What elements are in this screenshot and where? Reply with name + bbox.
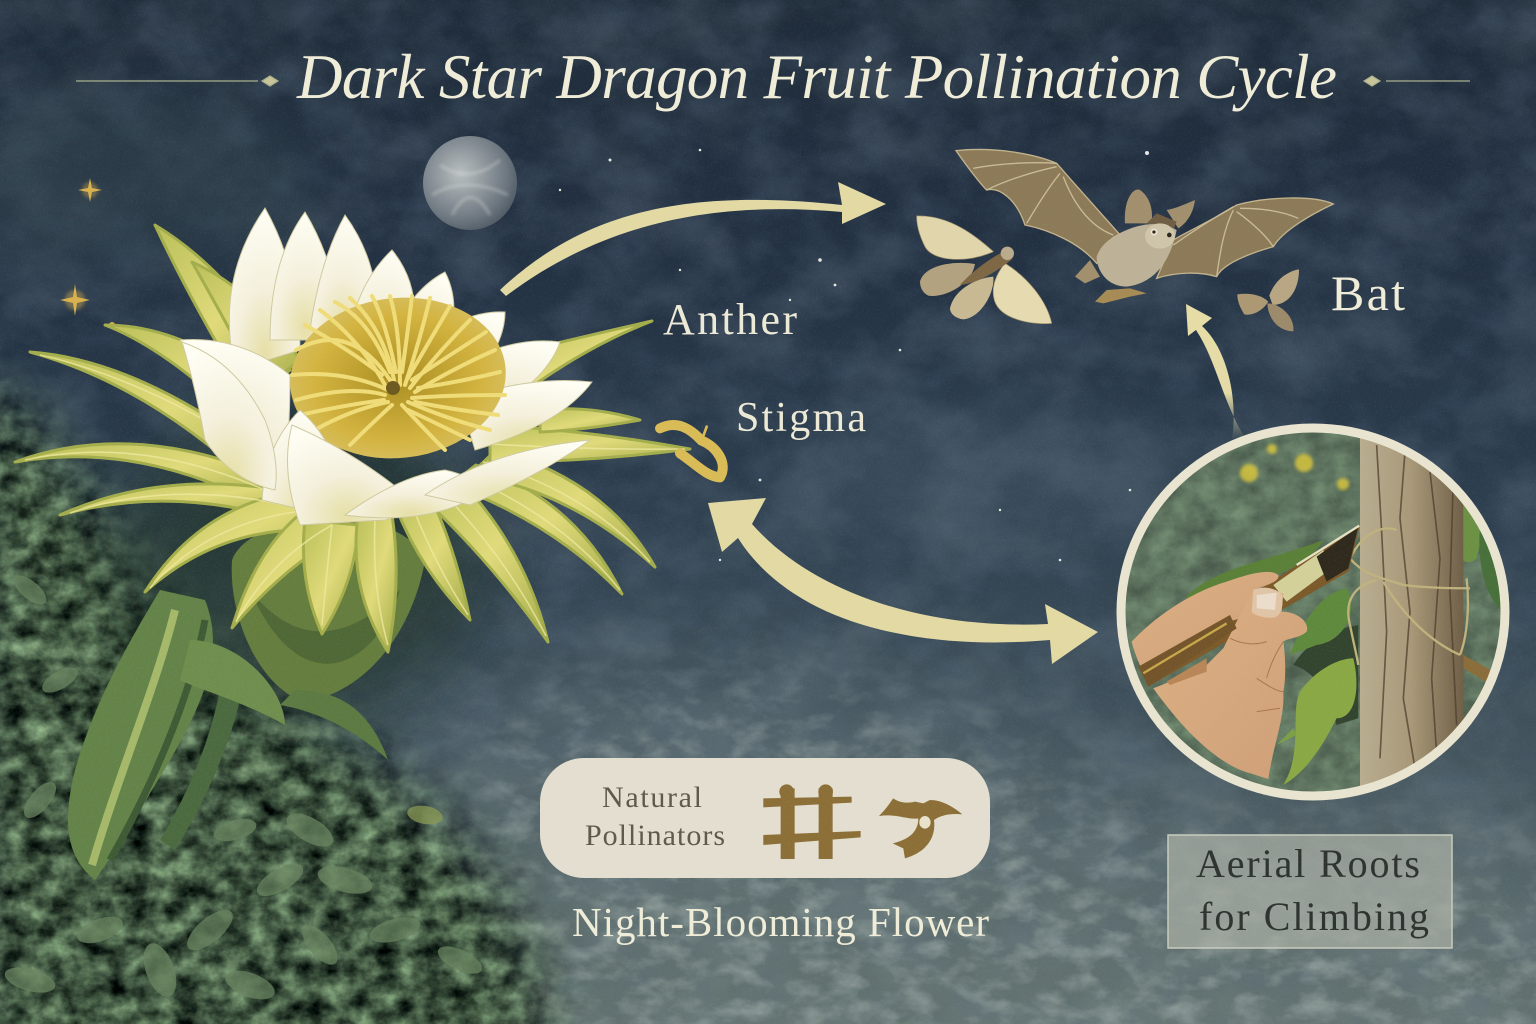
title ornament: right rule bbox=[1364, 76, 1470, 86]
inset tree trunk bbox=[1360, 432, 1463, 792]
icon: bat silhouette bbox=[879, 798, 962, 858]
small moth illustration bbox=[1237, 269, 1299, 331]
flower sepal midribs bbox=[25, 355, 685, 645]
arrow: flower stigma and hand pollination, double headed bbox=[708, 498, 1098, 664]
panel: natural pollinators legend bbox=[540, 758, 990, 878]
label: anther: Anther bbox=[663, 295, 797, 344]
moth illustration bbox=[917, 216, 1052, 324]
icon: stigma pollen ring bbox=[660, 425, 723, 477]
flower stem bbox=[68, 590, 285, 880]
pill text: Natural bbox=[602, 781, 702, 814]
label: night-blooming flower: Night-Blooming Flower bbox=[572, 899, 989, 945]
pill text bbox=[585, 781, 725, 852]
flower calyx bbox=[232, 519, 425, 702]
label: stigma: Stigma bbox=[736, 395, 866, 441]
inset: hand pollination circle bbox=[1110, 425, 1510, 815]
flower shadow behind plant bbox=[110, 410, 490, 710]
panel: aerial roots label bbox=[1168, 835, 1452, 948]
title ornament: left rule bbox=[76, 76, 278, 86]
inset backdrop bbox=[1126, 432, 1500, 792]
bat illustration bbox=[956, 149, 1333, 303]
arrow: flower to pollinators bbox=[500, 182, 886, 296]
inset ring bbox=[1121, 428, 1505, 796]
flower sepals bbox=[15, 225, 690, 652]
title: Dark Star Dragon Fruit Pollination Cycle bbox=[296, 42, 1337, 112]
panel: aerial roots label: for Climbing bbox=[1199, 894, 1429, 939]
label: bat: Bat bbox=[1331, 265, 1405, 321]
pill text: Pollinators bbox=[585, 819, 725, 852]
flower front petals bbox=[182, 342, 590, 525]
flower stamens and anthers bbox=[282, 287, 514, 469]
pollinators: bat and moths bbox=[917, 149, 1333, 331]
icon: wooden lattice bbox=[763, 784, 861, 859]
inset brush bbox=[1138, 525, 1360, 687]
panel: aerial roots label: Aerial Roots bbox=[1196, 841, 1420, 886]
inset twine bbox=[1348, 528, 1470, 665]
inset leaves bbox=[1185, 540, 1323, 598]
arrow: hand pollination up to bat bbox=[1186, 304, 1244, 440]
foliage: undergrowth bottom left bbox=[0, 368, 586, 1024]
inset hand bbox=[1132, 572, 1278, 673]
stars bbox=[559, 149, 1149, 561]
moon bbox=[423, 136, 517, 230]
flower bbox=[15, 208, 690, 760]
fireflies bbox=[60, 178, 115, 328]
flower back petals bbox=[180, 208, 592, 470]
